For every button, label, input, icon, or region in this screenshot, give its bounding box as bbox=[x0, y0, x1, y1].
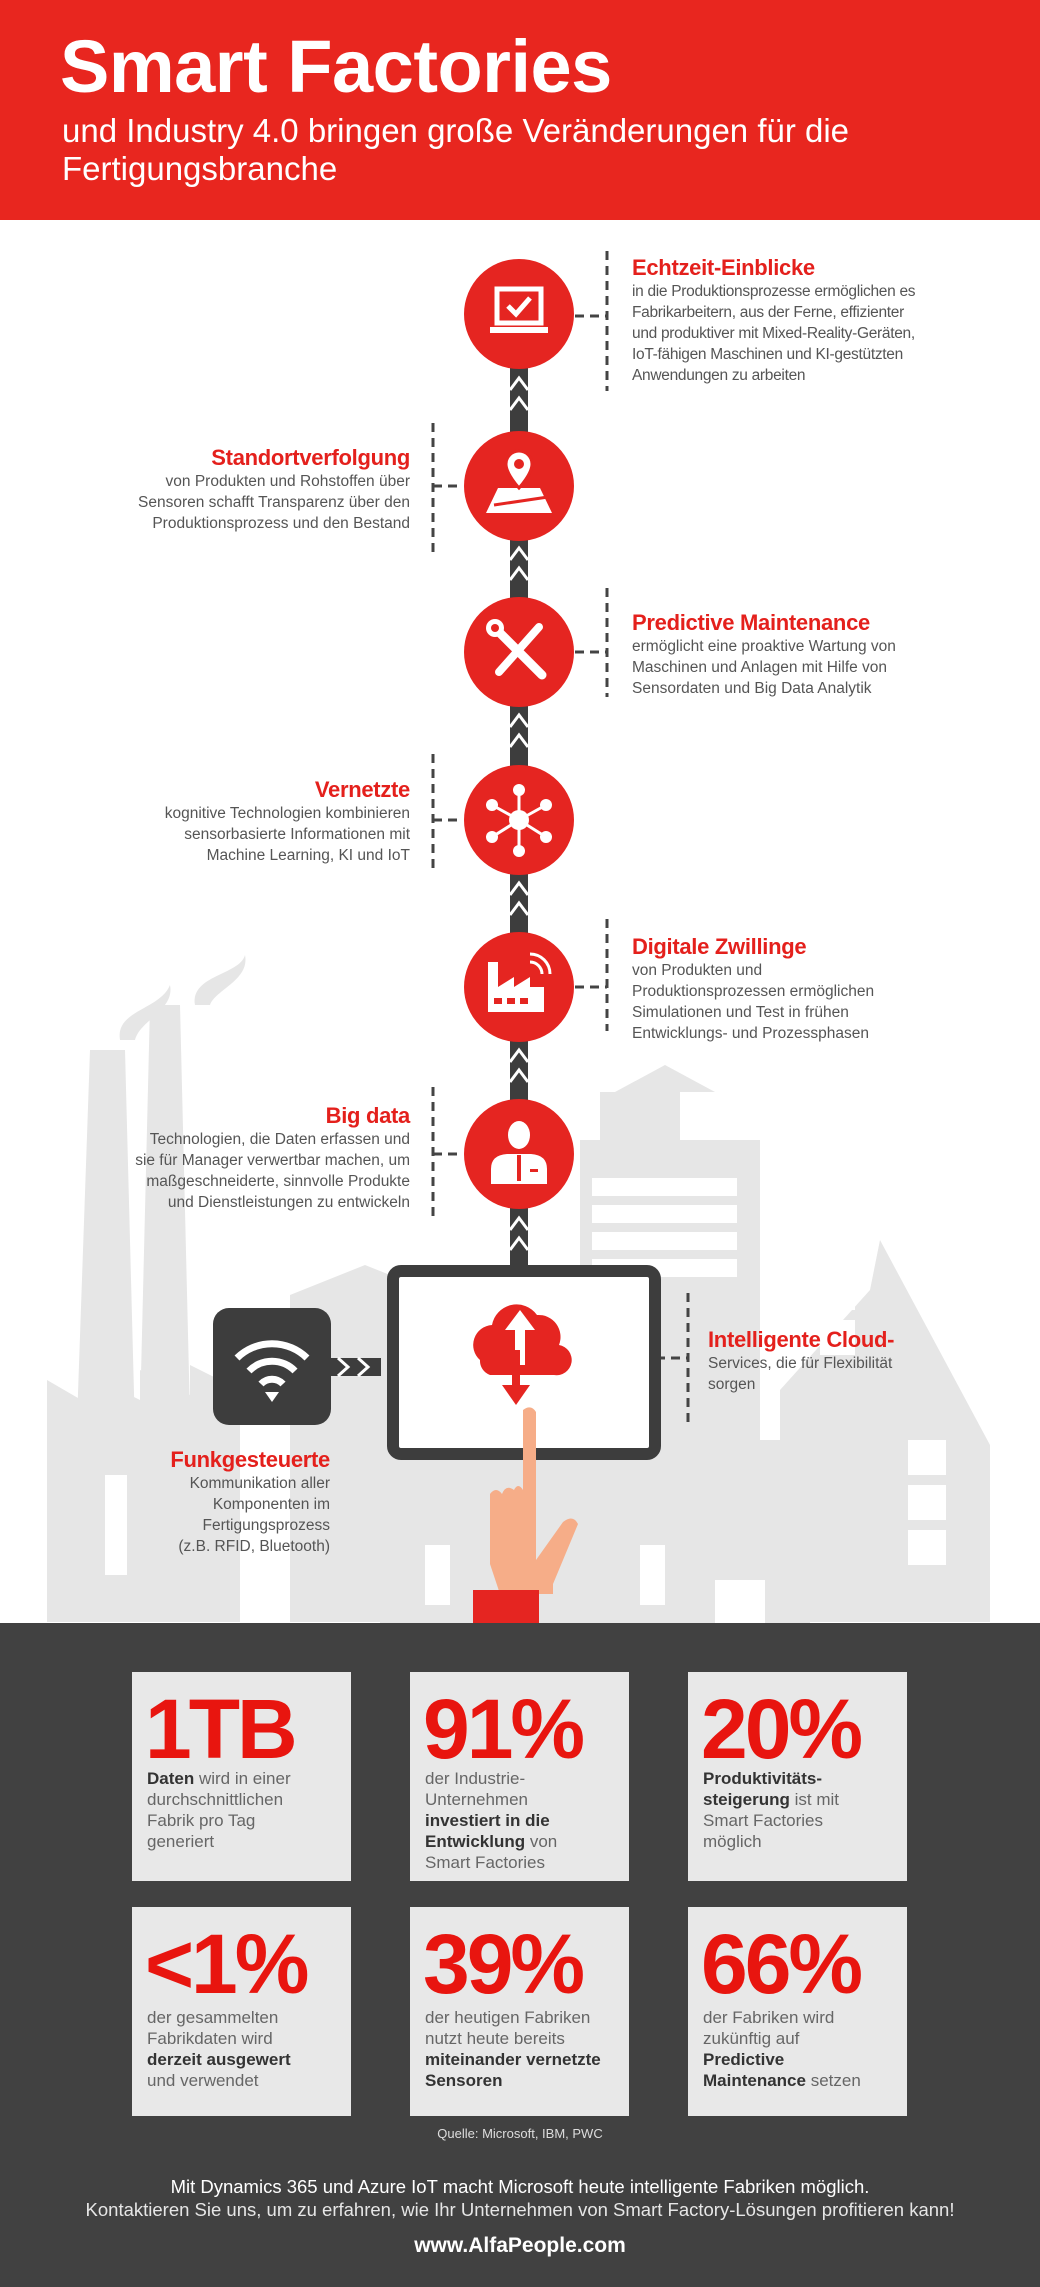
stat: 91%: Smart Factories bbox=[425, 1853, 545, 1872]
header banner bbox=[0, 0, 1040, 220]
title: Smart Factories bbox=[60, 25, 612, 108]
stat: <1% bbox=[132, 1907, 351, 2116]
text: Funkgesteuerte bbox=[170, 1447, 330, 1555]
text: Vernetzte: Vernetzte bbox=[315, 777, 410, 802]
text: Predictive Maintenance: Sensordaten und Big Data Analytik bbox=[632, 680, 872, 697]
icon: factory wifi bbox=[464, 932, 574, 1042]
text: Intelligente Cloud: Intelligente Cloud- bbox=[708, 1327, 894, 1352]
text: Predictive Maintenance: ermöglicht eine proaktive Wartung von bbox=[632, 638, 896, 655]
text: Echtzeit-Einblicke: IoT-fähigen Maschinen und KI-gestützten bbox=[632, 346, 903, 363]
stat: 20%: steigerung ist mit bbox=[703, 1790, 839, 1809]
text: Echtzeit-Einblicke: in die Produktionsprozesse ermöglichen es bbox=[632, 283, 915, 300]
text: Big data: sie für Manager verwertbar machen, um bbox=[135, 1152, 410, 1169]
stat: 39%: der heutigen Fabriken bbox=[425, 2008, 590, 2027]
stat: 39%: 39% bbox=[423, 1917, 582, 2011]
text: Funkgesteuerte: Komponenten im bbox=[213, 1496, 330, 1513]
text: Echtzeit-Einblicke: Anwendungen zu arbeiten bbox=[632, 367, 805, 384]
icon: laptop check bbox=[464, 259, 574, 369]
text: Big data bbox=[135, 1103, 410, 1211]
stat: 39%: Sensoren bbox=[425, 2071, 502, 2090]
text: Intelligente Cloud: Services, die für Flexibilität bbox=[708, 1355, 892, 1372]
text: Big data: maßgeschneiderte, sinnvolle Produkte bbox=[146, 1173, 410, 1190]
stat: 39% bbox=[410, 1907, 629, 2116]
icon: wifi box bbox=[213, 1308, 381, 1425]
subtitle bbox=[62, 112, 849, 187]
dark stats section bbox=[0, 1623, 1040, 2287]
source note: Quelle: Microsoft, IBM, PWC bbox=[437, 2126, 603, 2141]
text: Digitale Zwillinge: Simulationen und Test in frühen bbox=[632, 1004, 849, 1021]
stat: 1TB: 1TB bbox=[145, 1682, 295, 1776]
stat: 91% bbox=[410, 1672, 629, 1881]
text: Predictive Maintenance: Predictive Maintenance bbox=[632, 610, 870, 635]
stat: 91%: der Industrie- bbox=[425, 1769, 525, 1788]
text: Funkgesteuerte: Kommunikation aller bbox=[190, 1475, 330, 1492]
stat: 39%: miteinander vernetzte bbox=[425, 2050, 601, 2069]
text: Funkgesteuerte: Funkgesteuerte bbox=[170, 1447, 330, 1472]
text: Intelligente Cloud: sorgen bbox=[708, 1376, 755, 1393]
text: Predictive Maintenance: Maschinen und Anlagen mit Hilfe von bbox=[632, 659, 887, 676]
stat: 66%: 66% bbox=[701, 1917, 860, 2011]
text: Standortverfolgung: Produktionsprozess und den Bestand bbox=[152, 515, 410, 532]
text: Echtzeit-Einblicke: und produktiver mit Mixed-Reality-Geräten, bbox=[632, 325, 915, 342]
stat: 1TB: durchschnittlichen bbox=[147, 1790, 283, 1809]
text: Digitale Zwillinge: Digitale Zwillinge bbox=[632, 934, 806, 959]
tablet with cloud bbox=[387, 1265, 661, 1460]
text: Standortverfolgung: Sensoren schafft Transparenz über den bbox=[138, 494, 410, 511]
text: Echtzeit-Einblicke bbox=[632, 255, 915, 384]
subtitle: und Industry 4.0 bringen große Veränderungen für die bbox=[62, 112, 849, 149]
text: Echtzeit-Einblicke: Echtzeit-Einblicke bbox=[632, 255, 815, 280]
text: Digitale Zwillinge bbox=[632, 934, 874, 1042]
stat: 20% bbox=[688, 1672, 907, 1881]
timeline spine bbox=[432, 251, 690, 1422]
stat: 91%: 91% bbox=[423, 1682, 582, 1776]
website url: www.AlfaPeople.com bbox=[414, 2234, 626, 2257]
text: Intelligente Cloud bbox=[708, 1327, 894, 1393]
stat: 1TB bbox=[132, 1672, 351, 1881]
text: Funkgesteuerte: Fertigungsprozess bbox=[202, 1517, 330, 1534]
stat: 20%: 20% bbox=[701, 1682, 860, 1776]
stat: 20%: Produktivitäts- bbox=[703, 1769, 822, 1788]
text: Vernetzte bbox=[165, 777, 410, 864]
stat: 20%: Smart Factories bbox=[703, 1811, 823, 1830]
stat: <1%: der gesammelten bbox=[147, 2008, 278, 2027]
stat: <1%: derzeit ausgewert bbox=[147, 2050, 291, 2069]
icon: manager bbox=[464, 1099, 574, 1209]
footer call to action: Kontaktieren Sie uns, um zu erfahren, wie Ihr Unternehmen von Smart Factory-Lösungen profitieren kann! bbox=[86, 2199, 954, 2220]
text: Vernetzte: kognitive Technologien kombinieren bbox=[165, 805, 410, 822]
icon: network bbox=[464, 765, 574, 875]
text: Digitale Zwillinge: Entwicklungs- und Prozessphasen bbox=[632, 1025, 869, 1042]
background city silhouette bbox=[47, 956, 990, 1623]
stat: 1TB: generiert bbox=[147, 1832, 214, 1851]
footer call to action bbox=[86, 2176, 954, 2220]
icon: map pin bbox=[464, 431, 574, 541]
text: Echtzeit-Einblicke: Fabrikarbeitern, aus der Ferne, effizienter bbox=[632, 304, 904, 321]
stat: 66%: Maintenance setzen bbox=[703, 2071, 861, 2090]
stat: 66%: Predictive bbox=[703, 2050, 784, 2069]
stat: 66% bbox=[688, 1907, 907, 2116]
text: Funkgesteuerte: (z.B. RFID, Bluetooth) bbox=[178, 1538, 330, 1555]
text: Standortverfolgung: Standortverfolgung bbox=[211, 445, 410, 470]
text: Vernetzte: Machine Learning, KI und IoT bbox=[207, 847, 410, 864]
stat: 66%: der Fabriken wird bbox=[703, 2008, 834, 2027]
stat: 1TB: Fabrik pro Tag bbox=[147, 1811, 255, 1830]
footer call to action: Mit Dynamics 365 und Azure IoT macht Microsoft heute intelligente Fabriken möglich. bbox=[171, 2176, 869, 2197]
text: Digitale Zwillinge: Produktionsprozessen ermöglichen bbox=[632, 983, 874, 1000]
stat: 91%: investiert in die bbox=[425, 1811, 550, 1830]
stat: 20%: möglich bbox=[703, 1832, 762, 1851]
stat: <1%: und verwendet bbox=[147, 2071, 259, 2090]
text: Vernetzte: sensorbasierte Informationen mit bbox=[184, 826, 410, 843]
text: Standortverfolgung bbox=[138, 445, 410, 532]
text: Standortverfolgung: von Produkten und Rohstoffen über bbox=[166, 473, 410, 490]
stat: 39%: nutzt heute bereits bbox=[425, 2029, 565, 2048]
text: Big data: Technologien, die Daten erfassen und bbox=[150, 1131, 410, 1148]
stat: 1TB: Daten wird in einer bbox=[147, 1769, 291, 1788]
text: Big data: und Dienstleistungen zu entwickeln bbox=[168, 1194, 410, 1211]
stat: <1%: <1% bbox=[145, 1917, 306, 2011]
stat: <1%: Fabrikdaten wird bbox=[147, 2029, 273, 2048]
stat: 91%: Entwicklung von bbox=[425, 1832, 557, 1851]
text: Big data: Big data bbox=[326, 1103, 410, 1128]
stat: 91%: Unternehmen bbox=[425, 1790, 528, 1809]
stat: 66%: zukünftig auf bbox=[703, 2029, 799, 2048]
subtitle: Fertigungsbranche bbox=[62, 150, 337, 187]
text: Digitale Zwillinge: von Produkten und bbox=[632, 962, 762, 979]
icon: tools bbox=[464, 597, 574, 707]
icon: pointing hand bbox=[473, 1407, 578, 1623]
text: Predictive Maintenance bbox=[632, 610, 896, 697]
